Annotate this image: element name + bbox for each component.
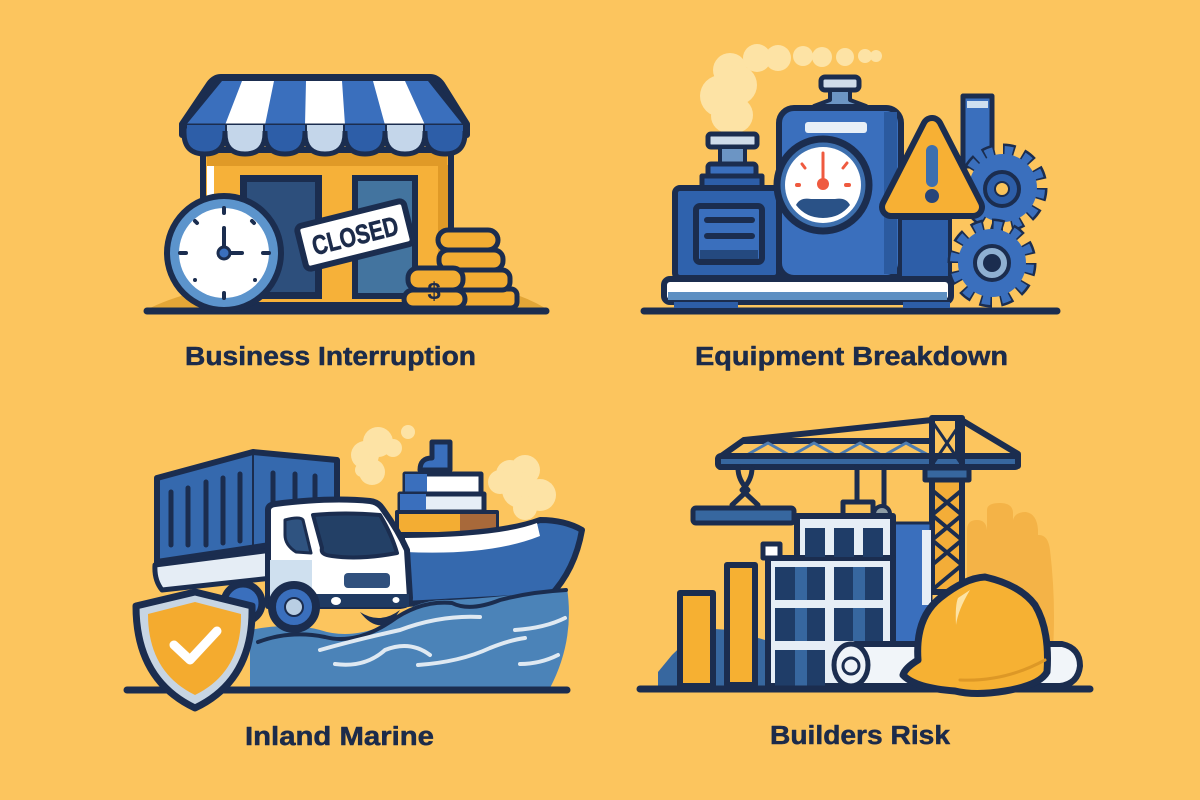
panel: Equipment Breakdown (644, 44, 1057, 371)
smoke (700, 44, 882, 133)
background fingers silhouette (967, 503, 1054, 650)
icon: clock (167, 196, 281, 310)
ground line (127, 686, 567, 694)
panel: Builders Risk (640, 418, 1090, 750)
ground line (644, 308, 1057, 314)
awning (182, 77, 467, 154)
label: Equipment Breakdown: Equipment Breakdown (695, 343, 1008, 371)
base platform (664, 279, 951, 308)
icon: hard hat (903, 577, 1048, 694)
crane (693, 418, 1018, 592)
gauge (777, 139, 869, 231)
water (250, 588, 569, 688)
ground line (640, 686, 1090, 692)
icon: warning triangle (891, 127, 973, 207)
label: Inland Marine: Inland Marine (245, 723, 434, 751)
icon: coin stack: $ (427, 278, 441, 305)
blueprint roll (834, 644, 1080, 686)
building (763, 516, 931, 686)
label: Business Interruption: Business Interruption (185, 343, 476, 371)
left motor (675, 134, 779, 278)
ship (397, 442, 582, 604)
panel: Business Interruption (147, 77, 546, 371)
icon: shield with check (136, 592, 252, 708)
side panel (900, 218, 950, 278)
sign: closed: CLOSED (309, 211, 402, 261)
smoke clouds (351, 425, 556, 520)
truck (155, 452, 410, 629)
ground shadow (150, 290, 545, 308)
store building (203, 150, 451, 305)
icon: coin stack (404, 230, 517, 308)
upper gear and pipe (963, 96, 1039, 224)
boiler tank (779, 77, 901, 278)
bar chart columns (658, 565, 765, 686)
ground line (147, 308, 546, 314)
lower gear (956, 227, 1028, 299)
label: Builders Risk: Builders Risk (770, 722, 951, 750)
panel: Inland Marine (127, 425, 582, 751)
sign: closed (296, 200, 414, 270)
